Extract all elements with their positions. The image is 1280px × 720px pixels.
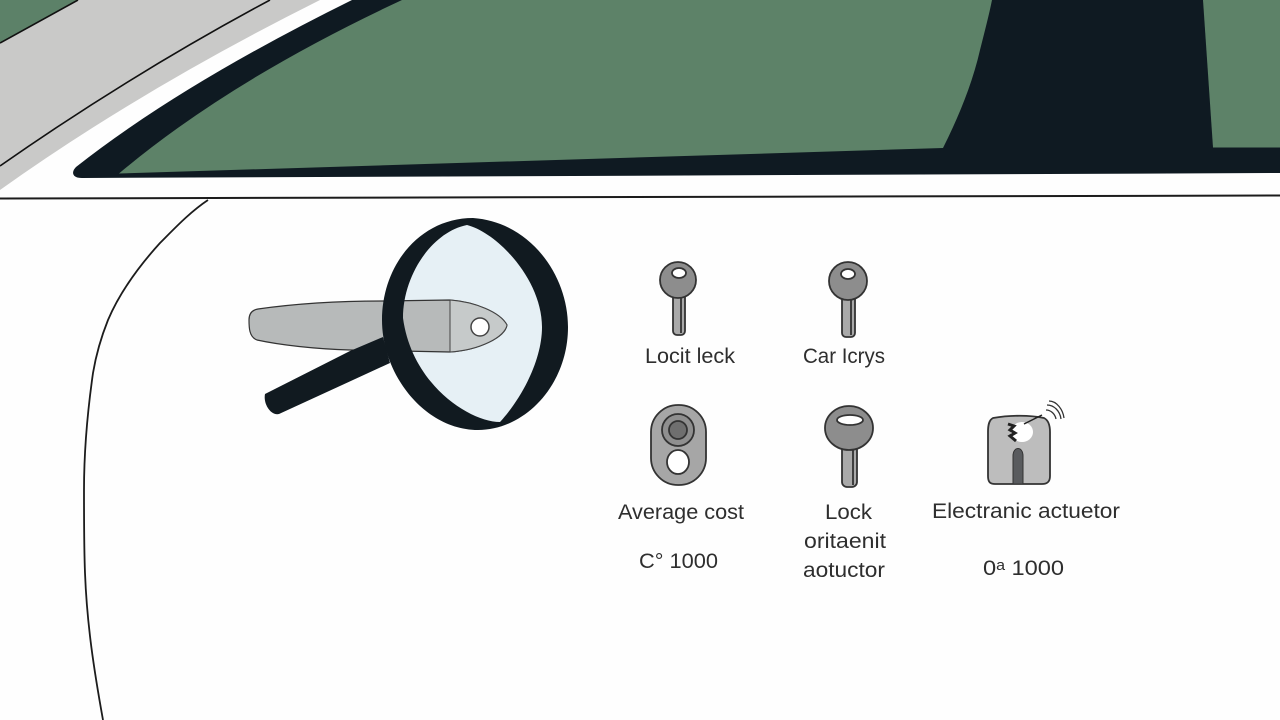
label: Locit leck [645, 345, 736, 368]
item: average cost [618, 405, 744, 573]
price: C° 1000 [639, 550, 718, 573]
icon: actuator [988, 401, 1064, 484]
icon: key [829, 262, 867, 337]
door outline curve [84, 200, 208, 720]
door top line [0, 196, 1280, 198]
icon: lock fob [651, 405, 706, 485]
item: lock cylinder actuator [803, 406, 886, 582]
magnifier ring [382, 218, 568, 430]
magnifying glass over door handle [249, 218, 568, 430]
price: 0ᵃ 1000 [983, 557, 1064, 580]
label: Lock [825, 501, 873, 524]
icon: key [825, 406, 873, 487]
item: lock key [645, 262, 736, 368]
car roof and gray trim [0, 0, 320, 190]
item: lock cylinder actuator: aotuctor [803, 559, 885, 582]
magnifier stick [265, 337, 390, 414]
icon: key [660, 262, 696, 335]
lens glass [403, 225, 542, 422]
car window frame [73, 0, 1280, 178]
door handle [249, 300, 507, 352]
label: Car Icrys [803, 345, 885, 368]
label: Electranic actuetor [932, 500, 1120, 523]
item: car keys [803, 262, 885, 368]
car window glass left [119, 0, 992, 174]
car window glass right [1203, 0, 1280, 148]
label: Average cost [618, 501, 744, 524]
item: lock cylinder actuator: oritaenit [804, 530, 886, 553]
item: electronic actuator [932, 401, 1120, 580]
